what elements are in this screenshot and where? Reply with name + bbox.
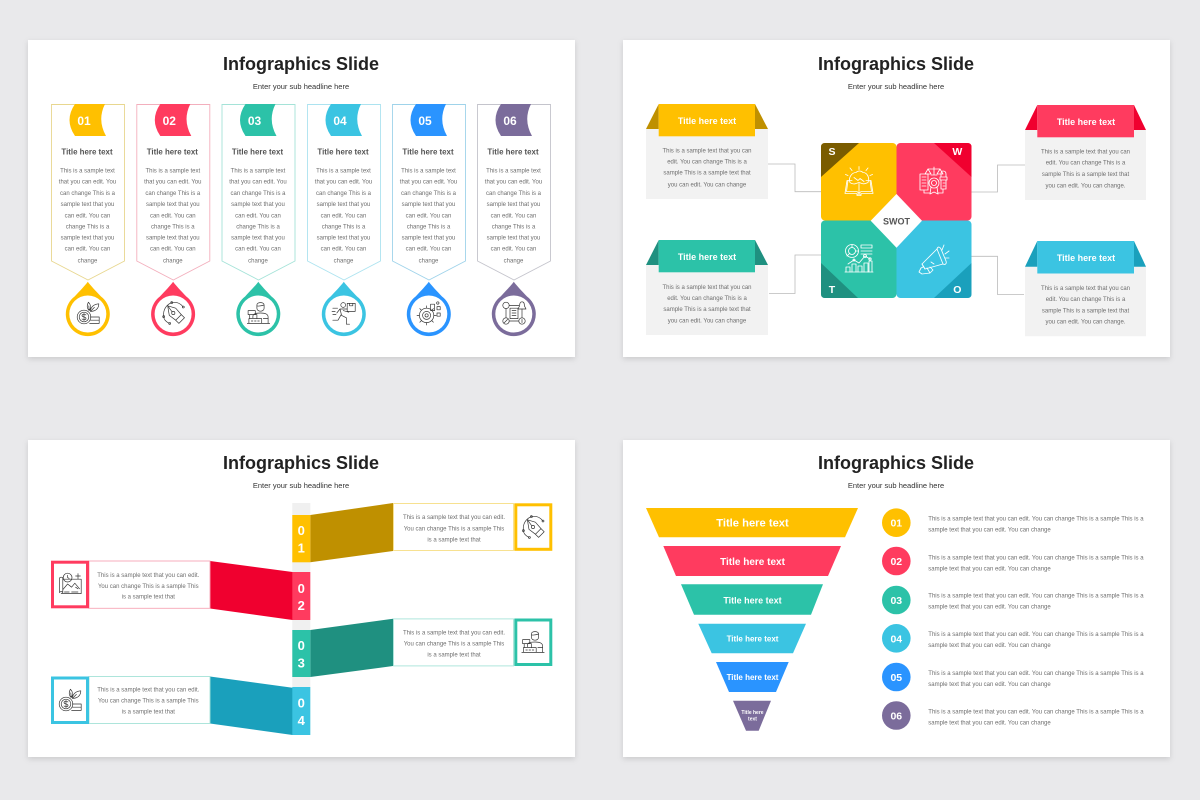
connector lines — [768, 164, 1025, 294]
column 04: sample text that you — [317, 202, 370, 208]
ribbon 04: You can change This is a sample This — [98, 699, 199, 705]
column 01: that you can edit. You — [59, 180, 116, 186]
ribbon 04: is a sample text that — [122, 710, 175, 716]
column 01 — [52, 104, 124, 336]
ribbon 03 — [292, 619, 551, 677]
heading: ribbon slide title: Infographics Slide — [223, 453, 379, 473]
callout: opportunities: This is a sample text that you can — [1041, 286, 1130, 292]
panel: six-step columns slide — [28, 40, 575, 357]
column 01: can edit. You can — [65, 247, 110, 253]
subheading: columns slide: Enter your sub headline here — [253, 82, 349, 91]
column 04: can change This is a — [316, 191, 372, 197]
numbered list: sample text that you can edit. You can change — [928, 643, 1051, 649]
heading: funnel slide title: Infographics Slide — [818, 453, 974, 473]
numbered list: sample text that you can edit. You can change — [928, 682, 1051, 688]
callout: threats: Title here text — [678, 252, 736, 262]
funnel chart: Title here text — [727, 635, 779, 644]
heading: SWOT slide title: Infographics Slide — [818, 54, 974, 74]
callout: opportunities: edit. You can change This is a — [1046, 297, 1126, 303]
SWOT matrix: O — [953, 284, 961, 296]
callout: strengths: sample This is a sample text that — [663, 171, 751, 177]
numbered list: 03 — [890, 595, 902, 607]
ribbon 01: You can change This is a sample This — [404, 526, 504, 532]
column 01: change — [78, 258, 98, 264]
ribbon 02: 0 — [298, 581, 305, 596]
callout: strengths: you can edit. You can change — [668, 182, 747, 188]
numbered list: This is a sample text that you can edit. You can change This is a sample This is a — [928, 671, 1144, 677]
heading: columns slide title: Infographics Slide — [223, 54, 379, 74]
column 04 — [308, 104, 380, 336]
callout: weaknesses: you can edit. You can change. — [1045, 183, 1126, 189]
callout: threats: edit. You can change This is a — [667, 296, 747, 302]
numbered list: 04 — [890, 633, 902, 645]
callout: threats: This is a sample text that you can — [662, 285, 752, 291]
column 05: This is a sample text — [401, 169, 456, 175]
column 05: can change This is a — [401, 191, 457, 197]
callout: weaknesses: edit. You can change This is a — [1046, 161, 1126, 167]
column 01: 01 — [77, 114, 91, 128]
column 03: sample text that you — [231, 202, 285, 208]
numbered list: This is a sample text that you can edit. You can change This is a sample This is a — [928, 556, 1144, 562]
column 02: This is a sample text — [145, 169, 200, 175]
column 04: This is a sample text — [316, 169, 371, 175]
column 02: sample text that you — [146, 236, 200, 242]
ribbon 02: This is a sample text that you can edit. — [97, 573, 200, 579]
column 01: sample text that you — [61, 236, 114, 242]
ribbon 02: You can change This is a sample This — [98, 584, 199, 590]
ribbon 03: You can change This is a sample This — [404, 642, 504, 648]
column 06: 06 — [503, 114, 517, 128]
column 04: can edit. You can — [321, 214, 366, 220]
callout: weaknesses — [1025, 105, 1146, 200]
subheading: SWOT slide: Enter your sub headline here — [848, 82, 944, 91]
column 03: that you can edit. You — [229, 180, 287, 186]
column 03: change — [248, 258, 269, 264]
column 05: that you can edit. You — [400, 180, 457, 186]
panel: funnel slide — [623, 440, 1170, 757]
column 04: 04 — [333, 114, 347, 128]
column 06: can edit. You can — [491, 214, 536, 220]
column 01: can edit. You can — [65, 214, 110, 220]
column 03: 03 — [248, 114, 261, 128]
numbered list: This is a sample text that you can edit. You can change This is a sample This is a — [928, 632, 1144, 638]
panel: SWOT slide — [623, 40, 1170, 357]
funnel chart: text — [748, 717, 757, 723]
callout: strengths — [646, 104, 768, 199]
ribbon 02: is a sample text that — [122, 595, 175, 601]
column 02: can change This is a — [145, 191, 201, 197]
center grey strip — [292, 503, 310, 735]
column 06: change This is a — [492, 225, 536, 231]
funnel chart — [646, 508, 858, 731]
ribbon 01: This is a sample text that you can edit. — [403, 515, 505, 521]
column 06 — [478, 104, 550, 336]
column 05: sample text that you — [402, 202, 455, 208]
SWOT matrix: SWOT — [883, 216, 910, 226]
column 05 — [392, 104, 466, 336]
column 02: can edit. You can — [150, 247, 196, 253]
column 06: can change This is a — [486, 191, 542, 197]
ribbon 03: This is a sample text that you can edit. — [403, 630, 505, 636]
ribbon 03: 3 — [298, 655, 305, 670]
SWOT matrix: W — [952, 146, 962, 158]
numbered list: This is a sample text that you can edit. You can change This is a sample This is a — [928, 594, 1144, 600]
ribbon 01 — [292, 503, 551, 562]
callout: strengths: Title here text — [678, 116, 736, 126]
ribbon 03: is a sample text that — [427, 653, 481, 659]
column 05: change This is a — [407, 225, 451, 231]
column 02: change — [163, 258, 183, 264]
subheading: ribbon slide: Enter your sub headline here — [253, 481, 349, 490]
column 01: change This is a — [66, 225, 110, 231]
column 03: change This is a — [236, 225, 280, 231]
column 01: sample text that you — [61, 202, 114, 208]
column 02 — [137, 104, 210, 336]
ribbon 02 — [52, 561, 310, 620]
numbered list — [882, 508, 1144, 730]
column 06: sample text that you — [487, 236, 540, 242]
column 06: This is a sample text — [486, 169, 541, 175]
numbered list: This is a sample text that you can edit. You can change This is a sample This is a — [928, 710, 1144, 716]
icon: charts — [845, 244, 873, 272]
column 04: that you can edit. You — [315, 180, 372, 186]
panel: ribbon list slide — [28, 440, 575, 757]
column 03 — [222, 104, 295, 336]
ribbon 04: This is a sample text that you can edit. — [97, 688, 200, 694]
callout: weaknesses: Title here text — [1057, 117, 1115, 127]
icon: brain and book — [845, 166, 873, 196]
numbered list: This is a sample text that you can edit. You can change This is a sample This is a — [928, 517, 1144, 523]
column 03: can edit. You can — [235, 247, 281, 253]
callout: strengths: This is a sample text that you can — [662, 149, 752, 155]
column 01: Title here text — [61, 148, 113, 156]
column 05: can edit. You can — [406, 247, 451, 253]
column 04: change This is a — [322, 225, 366, 231]
icon: megaphone — [919, 245, 949, 274]
column 04: Title here text — [317, 148, 369, 156]
icon: scales and award — [920, 167, 947, 194]
ribbon 04: 4 — [298, 713, 306, 728]
callout: opportunities: sample This is a sample text that — [1042, 309, 1129, 315]
column 04: change — [334, 258, 354, 264]
column 01: This is a sample text — [60, 169, 115, 175]
column 02: that you can edit. You — [144, 180, 201, 186]
column 05: can edit. You can — [406, 214, 451, 220]
numbered list: sample text that you can edit. You can change — [928, 721, 1051, 727]
SWOT matrix: S — [828, 146, 836, 158]
column 03: can change This is a — [231, 191, 286, 197]
column 05: Title here text — [402, 148, 454, 156]
numbered list: 05 — [890, 672, 902, 684]
column 06: that you can edit. You — [485, 180, 542, 186]
funnel chart: Title here text — [720, 557, 786, 568]
funnel chart: Title here text — [723, 596, 782, 606]
numbered list: 02 — [890, 556, 902, 568]
funnel chart: Title here text — [716, 518, 789, 530]
column 03: This is a sample text — [231, 169, 286, 175]
column 06: change — [504, 258, 524, 264]
callout: opportunities: Title here text — [1057, 253, 1115, 263]
column 05: change — [419, 258, 439, 264]
ribbon 03: 0 — [298, 638, 305, 653]
column 02: Title here text — [147, 148, 198, 156]
column 01: can change This is a — [60, 191, 116, 197]
column 06: Title here text — [487, 148, 539, 156]
numbered list: 06 — [890, 710, 902, 722]
column 02: can edit. You can — [150, 214, 196, 220]
callout: threats: you can edit. You can change — [668, 318, 747, 324]
callout: opportunities: you can edit. You can change. — [1045, 320, 1126, 326]
ribbon 01: 0 — [298, 523, 305, 538]
subheading: funnel slide: Enter your sub headline here — [848, 481, 944, 490]
callout: weaknesses: This is a sample text that you can — [1041, 150, 1130, 156]
column 03: can edit. You can — [235, 214, 281, 220]
column 05: sample text that you — [402, 236, 455, 242]
numbered list: 01 — [890, 518, 902, 530]
callout: weaknesses: sample This is a sample text that — [1042, 172, 1129, 178]
ribbon 02: 2 — [298, 598, 305, 613]
column 06: can edit. You can — [491, 247, 536, 253]
column 06: sample text that you — [487, 202, 540, 208]
column 04: can edit. You can — [321, 247, 366, 253]
column 02: change This is a — [151, 225, 195, 231]
ribbon 04: 0 — [298, 695, 305, 710]
SWOT matrix — [821, 143, 972, 298]
numbered list: sample text that you can edit. You can change — [928, 567, 1051, 573]
numbered list: sample text that you can edit. You can change — [928, 605, 1051, 611]
column 04: sample text that you — [317, 236, 370, 242]
numbered list: sample text that you can edit. You can change — [928, 528, 1051, 534]
ribbon 01: is a sample text that — [427, 537, 481, 543]
column 02: 02 — [163, 114, 176, 128]
ribbon 04 — [52, 676, 310, 735]
column 02: sample text that you — [146, 202, 200, 208]
column 05: 05 — [418, 114, 432, 128]
ribbon 01: 1 — [298, 540, 305, 555]
funnel chart: Title here — [741, 710, 764, 716]
SWOT matrix: T — [829, 284, 836, 296]
callout: threats — [646, 240, 768, 335]
callout: threats: sample This is a sample text that — [663, 307, 751, 313]
column 03: Title here text — [232, 148, 283, 156]
callout: opportunities — [1025, 241, 1146, 336]
callout: strengths: edit. You can change This is a — [667, 160, 747, 166]
funnel chart: Title here text — [727, 673, 779, 682]
column 03: sample text that you — [231, 236, 285, 242]
